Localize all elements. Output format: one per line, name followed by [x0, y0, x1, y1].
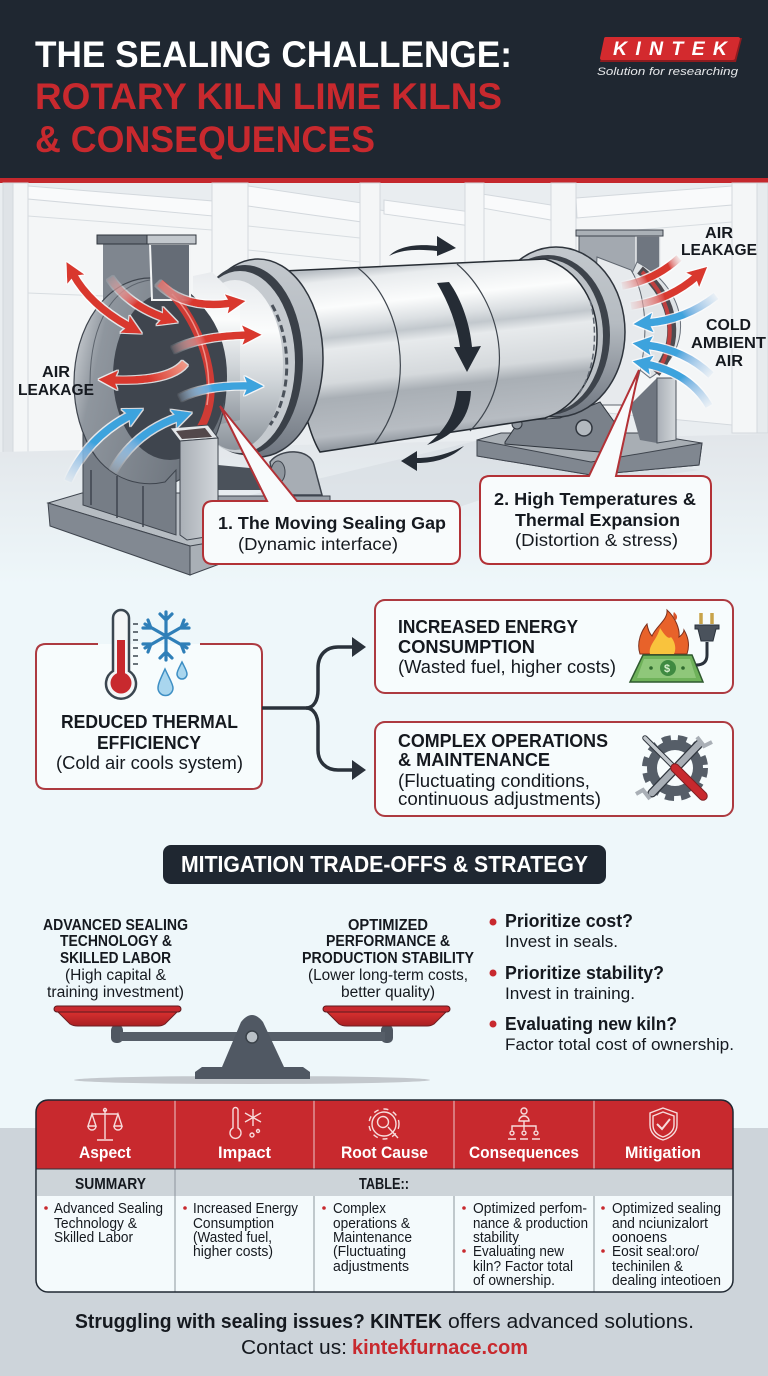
callout: high temperatures [480, 370, 711, 564]
panel: complex operations and maintenance: COMPLEX OPERATIONS [398, 730, 608, 751]
right flange [486, 247, 625, 417]
table column headings: Root Cause [341, 1143, 428, 1162]
table column: consequences: of ownership. [473, 1273, 555, 1289]
label: air leakage right: AIR [705, 225, 733, 242]
text: left trade-off: (High capital & [65, 967, 167, 984]
table column headings: Mitigation [625, 1143, 701, 1162]
callout: high temperatures: 2. High Temperatures & [494, 489, 696, 509]
icon: shield with check [650, 1108, 677, 1140]
table column: mitigation: and nciunizalort [612, 1216, 708, 1232]
front roller support [213, 452, 330, 520]
table column: root cause [322, 1201, 412, 1275]
left flange and tube [185, 259, 323, 457]
panel: reduced thermal efficiency [36, 610, 262, 789]
header banner [0, 0, 768, 183]
table column: mitigation: dealing inteotioen [612, 1273, 721, 1289]
kiln illustration [0, 183, 768, 585]
panel: increased energy consumption: INCREASED ENERGY [398, 616, 579, 637]
icon: burning money and plug: $ [664, 663, 670, 675]
callout: high temperatures: Thermal Expansion [515, 510, 680, 530]
table column: mitigation: Eosit seal:oro/ [612, 1244, 700, 1260]
table column: mitigation [601, 1201, 721, 1289]
lower grey background band [0, 1128, 768, 1376]
title: THE SEALING CHALLENGE: [35, 33, 512, 75]
table sub-heading row: TABLE:: [359, 1176, 409, 1193]
title: ROTARY KILN LIME KILNS [35, 75, 502, 117]
footer call to action: offers advanced solutions. [448, 1311, 694, 1333]
table column: consequences: kiln? Factor total [473, 1259, 573, 1275]
label: cold ambient air: AMBIENT [691, 335, 766, 352]
table sub-heading row: SUMMARY [75, 1176, 147, 1193]
panel: complex operations and maintenance [375, 722, 733, 816]
table column headings: Aspect [79, 1143, 131, 1162]
callout: high temperatures: (Distortion & stress) [515, 530, 678, 550]
right stand and base [477, 230, 702, 475]
table column: mitigation: techinilen & [612, 1259, 683, 1275]
title: & CONSEQUENCES [35, 118, 375, 160]
text: right trade-off: (Lower long-term costs, [308, 967, 468, 984]
table column: root cause: Complex [333, 1201, 387, 1217]
label: air leakage left [18, 364, 94, 399]
icon: burning money and plug [630, 610, 719, 682]
text: left trade-off: training investment) [47, 984, 184, 1001]
text: left trade-off: SKILLED LABOR [60, 950, 171, 967]
text: right trade-off: PERFORMANCE & [326, 933, 450, 950]
table column headings: Consequences [469, 1143, 579, 1162]
footer call to action: Contact us: [241, 1337, 347, 1359]
rotation arrows [389, 236, 481, 471]
footer call to action: Struggling with sealing issues? KINTEK [75, 1311, 443, 1333]
footer call to action [75, 1311, 694, 1359]
panel: increased energy consumption [375, 600, 733, 693]
panel: increased energy consumption: (Wasted fuel, higher costs) [398, 657, 616, 677]
list: strategy bullets: Factor total cost of ownership. [505, 1035, 734, 1054]
list: strategy bullets: Invest in seals. [505, 932, 618, 951]
panel: increased energy consumption: CONSUMPTION [398, 636, 535, 657]
right seal ring [620, 262, 681, 378]
table sub-heading row [75, 1176, 409, 1193]
air leakage arrows [73, 258, 697, 380]
label: cold ambient air: AIR [715, 353, 743, 370]
callout: moving sealing gap [203, 406, 460, 564]
icon: scales of justice [88, 1108, 122, 1140]
panel: complex operations and maintenance: (Fluctuating conditions, [398, 771, 590, 791]
text: right trade-off: OPTIMIZED [348, 917, 428, 934]
table column: aspect: Advanced Sealing [54, 1201, 163, 1217]
icon: organisation chart [508, 1108, 540, 1139]
list: strategy bullets: Invest in training. [505, 984, 635, 1003]
label: air leakage right: LEAKAGE [681, 242, 757, 259]
table column: root cause: (Fluctuating [333, 1244, 406, 1260]
table column: mitigation: oonoens [612, 1230, 667, 1246]
label: cold ambient air [691, 317, 766, 370]
title [35, 33, 512, 160]
heading: mitigation trade-offs and strategy [163, 845, 606, 884]
list: strategy bullets: Prioritize stability? [505, 963, 664, 983]
label: air leakage left: LEAKAGE [18, 382, 94, 399]
list: strategy bullets: Evaluating new kiln? [505, 1014, 677, 1034]
arrows: branching connector [262, 637, 366, 780]
logo: KINTEK: KINTEK [613, 38, 729, 60]
icon: gear and search [369, 1109, 399, 1139]
text: right trade-off [302, 917, 475, 1001]
table column: aspect: Skilled Labor [54, 1230, 133, 1246]
summary table [36, 1100, 733, 1292]
label: air leakage right [681, 225, 757, 259]
text: right trade-off: PRODUCTION STABILITY [302, 950, 475, 967]
kiln body [283, 259, 597, 452]
table column: impact [183, 1201, 299, 1260]
table column: impact: (Wasted fuel, [193, 1230, 272, 1246]
table column: consequences: stability [473, 1230, 520, 1246]
table column: aspect [44, 1201, 163, 1246]
left stand and housing [48, 235, 227, 575]
panel: complex operations and maintenance: & MAINTENANCE [398, 749, 550, 770]
label: cold ambient air: COLD [706, 317, 751, 334]
table column: consequences [462, 1201, 588, 1289]
callout: moving sealing gap: 1. The Moving Sealing Gap [218, 513, 446, 533]
cold ambient air arrows [68, 296, 716, 481]
table column: consequences: Optimized perfom- [473, 1201, 587, 1217]
panel: reduced thermal efficiency: REDUCED THERMAL [61, 711, 238, 732]
icon: thermometer and snow [230, 1108, 261, 1138]
icon: thermometer, snowflake and drops [106, 610, 189, 699]
table column: root cause: adjustments [333, 1259, 409, 1275]
text: right trade-off: better quality) [341, 984, 435, 1001]
list: strategy bullets [490, 911, 734, 1054]
panel: reduced thermal efficiency: EFFICIENCY [97, 732, 202, 753]
table column headings [79, 1143, 701, 1162]
callout: moving sealing gap: (Dynamic interface) [238, 534, 398, 554]
logo: KINTEK [597, 37, 742, 78]
table column: mitigation: Optimized sealing [612, 1201, 721, 1217]
table column headings: Impact [218, 1143, 271, 1162]
label: air leakage left: AIR [42, 364, 70, 381]
table column: impact: Increased Energy [193, 1201, 299, 1217]
table column: impact: higher costs) [193, 1244, 273, 1260]
table column: impact: Consumption [193, 1216, 274, 1232]
table column: consequences: nance & production [473, 1216, 588, 1232]
icon: balance scale [54, 1006, 450, 1084]
table column: aspect: Technology & [54, 1216, 137, 1232]
panel: reduced thermal efficiency: (Cold air cools system) [56, 753, 243, 773]
factory background [0, 183, 768, 585]
list: strategy bullets: Prioritize cost? [505, 911, 633, 931]
table column: root cause: operations & [333, 1216, 410, 1232]
panel: complex operations and maintenance: continuous adjustments) [398, 789, 601, 809]
text: left trade-off: TECHNOLOGY & [60, 933, 172, 950]
text: left trade-off: ADVANCED SEALING [43, 917, 188, 934]
icon: gear, wrench and screwdriver [636, 737, 712, 799]
text: left trade-off [43, 917, 188, 1001]
heading: mitigation trade-offs and strategy: MITIGATION TRADE-OFFS & STRATEGY [181, 851, 588, 877]
table column: root cause: Maintenance [333, 1230, 412, 1246]
table column: consequences: Evaluating new [473, 1244, 564, 1260]
logo: KINTEK: Solution for researching [597, 66, 739, 78]
footer call to action: kintekfurnace.com [352, 1337, 528, 1359]
